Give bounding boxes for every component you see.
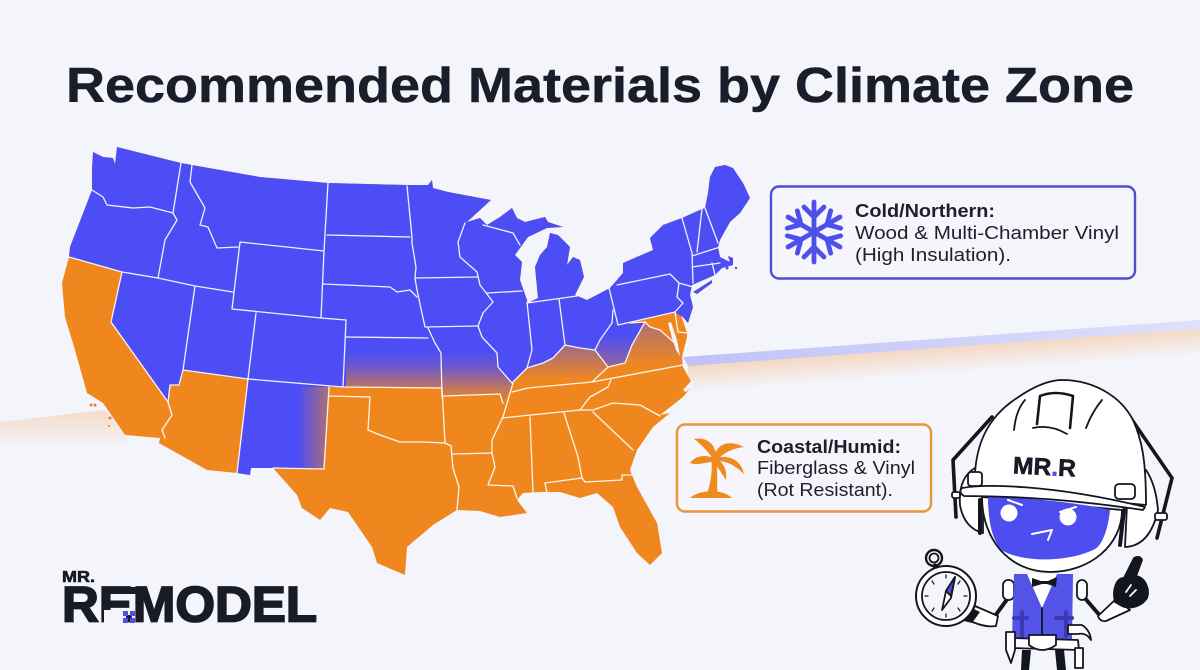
callout text: coastal humid: Fiberglass & Vinyl [757, 458, 915, 478]
icon: snowflake [783, 202, 845, 262]
callout: coastal humid [677, 424, 931, 512]
ear muffs and headband [953, 417, 1172, 547]
callout text: cold northern: (High Insulation). [855, 245, 1011, 265]
zone fills [62, 147, 750, 575]
callout text: coastal humid [757, 437, 915, 500]
helmet label: MR.R [1012, 452, 1077, 483]
water cut-outs [668, 322, 694, 392]
mascot: robot with hard hat and compass [916, 380, 1172, 670]
callout text: coastal humid: Coastal/Humid: [757, 437, 901, 457]
callout text: cold northern: Wood & Multi-Chamber Vinyl [855, 223, 1119, 243]
logo: Mr. Remodel: REMODEL [62, 576, 317, 632]
callout text: cold northern [855, 201, 1119, 265]
left arm and compass [916, 550, 1014, 626]
legs [1021, 650, 1066, 670]
vest [1012, 574, 1073, 640]
title: Recommended Materials by Climate Zone [66, 59, 1134, 113]
logo: Mr. Remodel: MR. [62, 569, 95, 586]
state borders [69, 163, 720, 510]
robot head [982, 497, 1122, 572]
right arm and pointing hand [1077, 557, 1148, 621]
callout: cold northern [771, 186, 1135, 278]
map: US climate zones [62, 147, 750, 575]
callout text: cold northern: Cold/Northern: [855, 201, 995, 221]
logo window icon [123, 611, 135, 623]
callout text: coastal humid: (Rot Resistant). [757, 480, 893, 500]
light beam: left climate divider [0, 410, 128, 450]
hard hat [952, 380, 1167, 520]
icon: palm tree [690, 439, 744, 498]
light beam: right climate divider [683, 320, 1200, 405]
robot face [988, 497, 1110, 559]
tool belt [1006, 625, 1091, 668]
islands [90, 404, 112, 427]
